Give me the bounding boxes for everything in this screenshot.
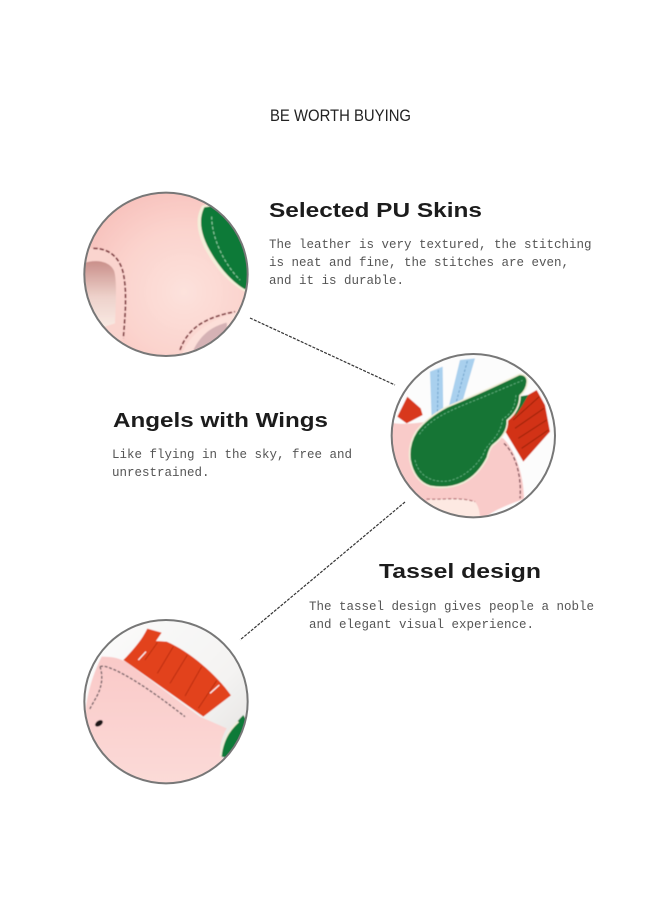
text: tassel description: The tassel design gives people a noble xyxy=(309,600,594,614)
connector: top circle to middle circle xyxy=(250,318,395,385)
circle photo: green wing detail xyxy=(390,352,557,522)
text: wings description: unrestrained. xyxy=(112,466,210,480)
text: tassel description xyxy=(309,600,594,632)
connector: middle circle to bottom circle xyxy=(240,502,405,640)
text: tassel description: and elegant visual experience. xyxy=(309,618,534,632)
text: PU skins description xyxy=(269,238,592,288)
text: PU skins description: and it is durable. xyxy=(269,274,404,288)
text: PU skins description: is neat and fine, the stitches are even, xyxy=(269,256,569,270)
circle photo: PU skin detail xyxy=(80,190,257,360)
text: PU skins description: The leather is very textured, the stitching xyxy=(269,238,592,252)
text: wings description: Like flying in the sky, free and xyxy=(112,448,352,462)
heading: Tassel design: Tassel design xyxy=(379,561,541,583)
heading: Selected PU Skins: Selected PU Skins xyxy=(269,200,482,222)
heading: Angels with Wings: Angels with Wings xyxy=(113,410,328,432)
circle photo: tassel detail xyxy=(80,617,253,790)
text: wings description xyxy=(112,448,352,480)
title: BE WORTH BUYING xyxy=(270,106,411,125)
